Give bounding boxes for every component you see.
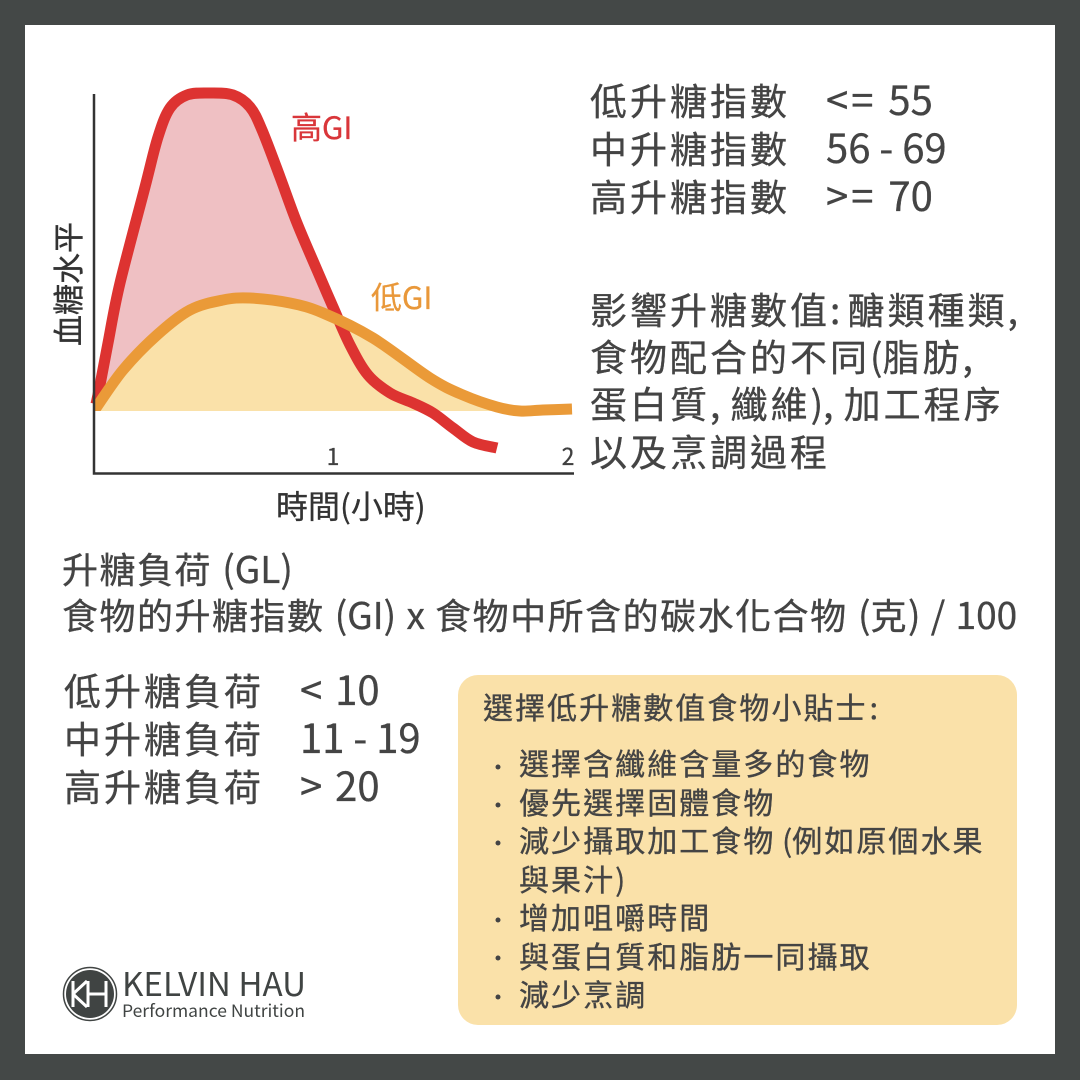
glycemic load definition: 食物的升糖指數 (GI) x 食物中所含的碳水化合物 (克) / 100 [62,586,1017,640]
factors affecting GI: 影響升糖數值: 醣類種類, [590,281,1018,335]
low GL value: < 10 [300,659,380,717]
chart: blood glucose response curves [44,88,574,528]
high GI curve [96,93,497,448]
tips list: 與蛋白質和脂肪一同攝取 [519,933,872,977]
mid GL value: 11 - 19 [300,707,421,765]
factors affecting GI: 食物配合的不同(脂肪, [590,328,973,382]
panel: tips for low GI eating [458,675,1017,1025]
tick label 1: 1 [327,438,339,472]
x axis title: 時間(小時) [276,482,426,528]
high GI area fill [96,93,350,411]
mid GI range: 中升糖指數 [590,120,790,174]
y axis title: 血糖水平 [44,222,89,346]
factors affecting GI: 以及烹調過程 [590,423,830,477]
label high GI: 高GI [291,103,352,148]
glycemic load definition: 升糖負荷 (GL) [62,540,293,594]
factors affecting GI [590,281,1018,477]
mid GI value: 56 - 69 [826,117,947,175]
logo tagline: Performance Nutrition [122,997,305,1022]
GI ranges [590,69,947,223]
tick label 2: 2 [562,438,574,472]
tips list: 與果汁) [519,856,627,900]
GL ranges [64,659,421,813]
tips list: 選擇含纖維含量多的食物 [519,740,872,784]
glycemic load definition [62,540,1017,640]
high GI range: 高升糖指數 [590,168,790,222]
tips heading: 選擇低升糖數值食物小貼士: [483,684,880,728]
high GI value: >= 70 [826,165,933,223]
chart axes [94,94,574,474]
low GI range: 低升糖指數 [590,72,790,126]
low GI value: <= 55 [826,69,933,127]
low GI area fill [96,298,492,411]
low GI curve [93,298,572,412]
tips list: 減少攝取加工食物 (例如原個水果 [519,817,985,861]
logo: Kelvin Hau Performance Nutrition [62,962,306,1022]
high GL value: > 20 [300,755,380,813]
factors affecting GI: 蛋白質, 纖維), 加工程序 [590,375,1004,429]
tips list: 增加咀嚼時間 [519,894,711,938]
low GL range: 低升糖負荷 [64,662,264,716]
tips list: 減少烹調 [519,971,647,1015]
tips list: 優先選擇固體食物 [519,779,775,823]
label low GI: 低GI [371,273,432,318]
high GL range: 高升糖負荷 [64,758,264,812]
mid GL range: 中升糖負荷 [64,710,264,764]
logo badge [64,968,116,1020]
